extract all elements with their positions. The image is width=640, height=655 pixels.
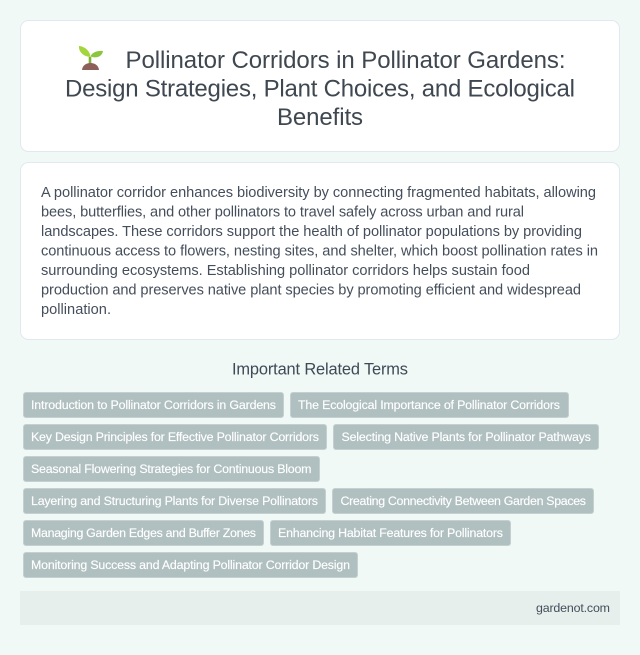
tag: native plants: Selecting Native Plants for Pollinator Pathways — [342, 430, 591, 444]
text block: description: bees, butterflies, and other pollinators to travel safely across urban and rural — [41, 204, 524, 220]
tag: habitat features: Enhancing Habitat Features for Pollinators — [278, 526, 503, 540]
tag: habitat features — [270, 520, 510, 546]
title: Pollinator Corridors in Pollinator Gardens: — [126, 47, 566, 74]
tag: introduction: Introduction to Pollinator Corridors in Gardens — [31, 398, 276, 412]
tag: connectivity — [332, 488, 594, 514]
panel: title card — [20, 20, 620, 152]
tag: ecological importance — [290, 392, 568, 418]
footer — [20, 591, 620, 625]
tag: layering — [24, 488, 326, 514]
tag: key design principles: Key Design Principles for Effective Pollinator Corridors — [31, 430, 319, 444]
tag list — [24, 392, 598, 578]
tag: native plants — [334, 424, 598, 450]
tag: ecological importance: The Ecological Importance of Pollinator Corridors — [298, 398, 560, 412]
tag: edges and buffers: Managing Garden Edges and Buffer Zones — [31, 526, 256, 540]
text block: description — [41, 185, 598, 318]
text block: description: landscapes. These corridors support the health of pollinator populations by providing — [41, 224, 582, 240]
tag: edges and buffers — [24, 520, 264, 546]
panel: description — [20, 162, 620, 340]
text block: description: surrounding ecosystems. Establishing pollinator corridors helps sustain food — [41, 263, 530, 279]
title: Benefits — [277, 104, 363, 131]
text block: description: production and preserves native plant species by promoting efficient and widespread — [41, 282, 581, 298]
title — [65, 47, 575, 131]
heading: important related terms: Important Related Terms — [232, 360, 408, 378]
tag: introduction — [24, 392, 284, 418]
tag: connectivity: Creating Connectivity Between Garden Spaces — [340, 494, 586, 508]
title: Design Strategies, Plant Choices, and Ecological — [65, 76, 575, 102]
icon: seedling — [79, 46, 103, 70]
tag: key design principles — [24, 424, 326, 450]
text block: description: A pollinator corridor enhances biodiversity by connecting fragmented habitats, allowing — [41, 185, 596, 201]
tag: seasonal flowering — [24, 456, 320, 482]
text block: description: pollination. — [41, 302, 111, 318]
tag: layering: Layering and Structuring Plants for Diverse Pollinators — [31, 494, 318, 508]
footer: gardenot.com — [536, 601, 610, 615]
text block: description: continuous access to flowers, nesting sites, and shelter, which boost pollination rates in — [41, 244, 598, 260]
tag: monitoring — [24, 552, 358, 578]
tag: monitoring: Monitoring Success and Adapting Pollinator Corridor Design — [31, 558, 350, 572]
tag: seasonal flowering: Seasonal Flowering Strategies for Continuous Bloom — [31, 462, 312, 476]
